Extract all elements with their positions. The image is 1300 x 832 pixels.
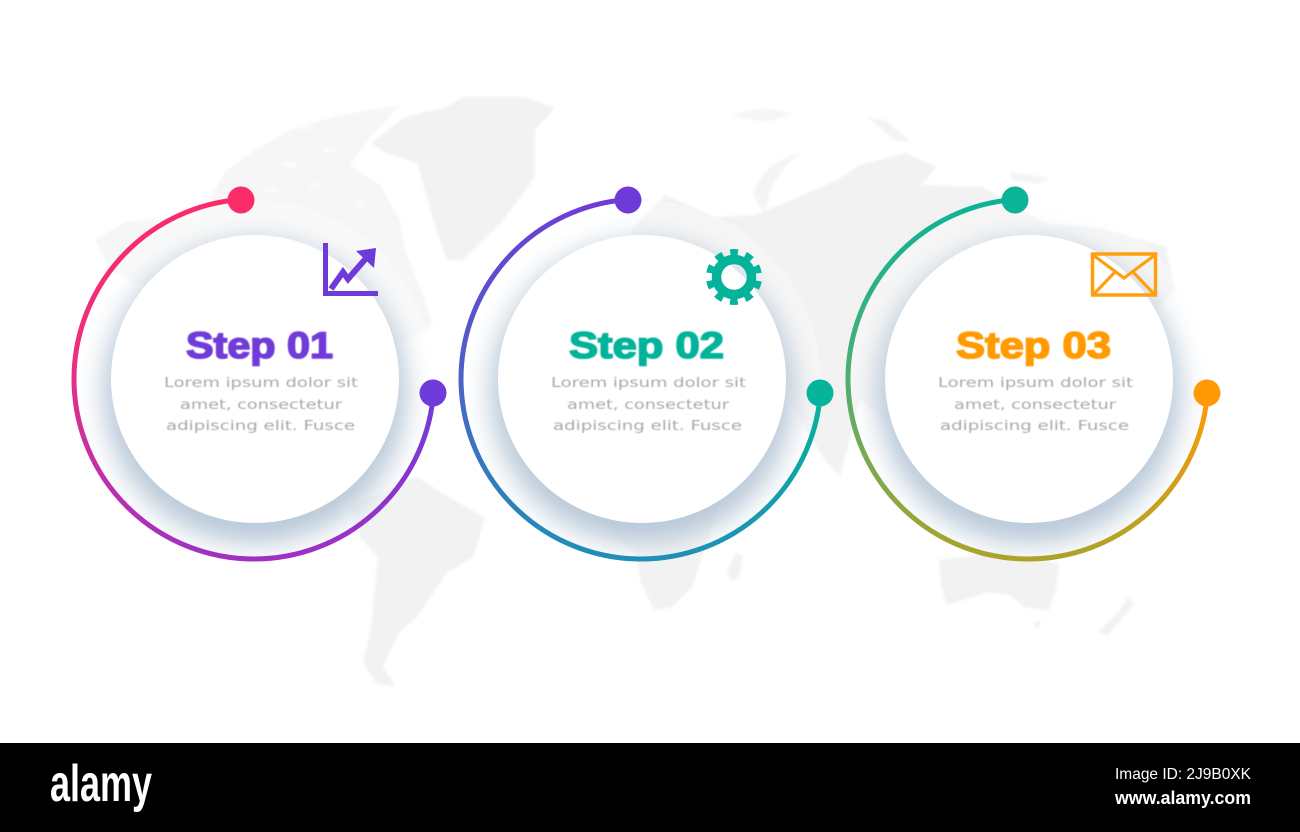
world map bbox=[95, 97, 1175, 687]
footer bar bbox=[0, 743, 1300, 832]
shadow 2 bbox=[476, 226, 804, 556]
shadow 3 bbox=[863, 230, 1196, 556]
text block 1: amet, consectetur bbox=[180, 398, 343, 413]
step 1 panel bbox=[74, 186, 447, 559]
step 2 panel bbox=[461, 186, 834, 559]
step 3 panel bbox=[848, 186, 1220, 559]
image id: Image ID: 2J9B0XK bbox=[1115, 766, 1251, 783]
Madagascar bbox=[727, 553, 743, 582]
disc 1 bbox=[111, 235, 399, 523]
text block 2: Lorem ipsum dolor sit bbox=[551, 376, 746, 391]
text block 2 bbox=[551, 376, 746, 434]
logo: alamy: alamy bbox=[50, 755, 152, 813]
Africa bbox=[560, 480, 720, 610]
text block 1: Lorem ipsum dolor sit bbox=[164, 376, 358, 391]
icon: chart bbox=[326, 243, 378, 294]
dot: purple bbox=[420, 380, 446, 406]
dot: orange bbox=[1194, 380, 1220, 406]
disc 3 bbox=[885, 235, 1173, 523]
text block 3: adipiscing elit. Fusce bbox=[940, 419, 1129, 434]
heading: step 02: Step 02 bbox=[569, 325, 724, 366]
dot: violet bbox=[614, 186, 642, 214]
Scandinavia bbox=[753, 153, 800, 215]
text block 1 bbox=[164, 376, 358, 434]
ring 1 bbox=[74, 199, 433, 559]
Greenland bbox=[371, 97, 555, 260]
heading: step 03: Step 03 bbox=[956, 325, 1111, 366]
arctic islands bbox=[868, 118, 912, 142]
ring 2 bbox=[461, 199, 820, 559]
dot: green bbox=[1002, 186, 1028, 214]
heading: step 01: Step 01 bbox=[186, 325, 333, 366]
South America bbox=[350, 477, 485, 687]
Australia bbox=[939, 552, 1059, 610]
text block 3: Lorem ipsum dolor sit bbox=[938, 376, 1133, 391]
text block 3: amet, consectetur bbox=[954, 398, 1117, 413]
ring 3 bbox=[848, 199, 1207, 559]
Tasmania bbox=[1033, 622, 1042, 630]
North America bbox=[95, 105, 433, 470]
disc 2 bbox=[498, 235, 786, 523]
text block 3 bbox=[938, 376, 1133, 434]
website: www.alamy.com bbox=[1114, 788, 1251, 808]
text block 2: adipiscing elit. Fusce bbox=[553, 419, 742, 434]
icon: gear bbox=[709, 252, 759, 302]
New Zealand bbox=[1098, 597, 1134, 635]
icon: envelope bbox=[1092, 254, 1156, 295]
dot: teal bbox=[806, 380, 834, 406]
shadow 1 bbox=[88, 229, 422, 556]
Eurasia bbox=[631, 153, 1175, 500]
arctic speckles bbox=[261, 126, 366, 207]
dot: pink bbox=[228, 186, 254, 214]
text block 2: amet, consectetur bbox=[567, 398, 730, 413]
text block 1: adipiscing elit. Fusce bbox=[166, 419, 355, 434]
